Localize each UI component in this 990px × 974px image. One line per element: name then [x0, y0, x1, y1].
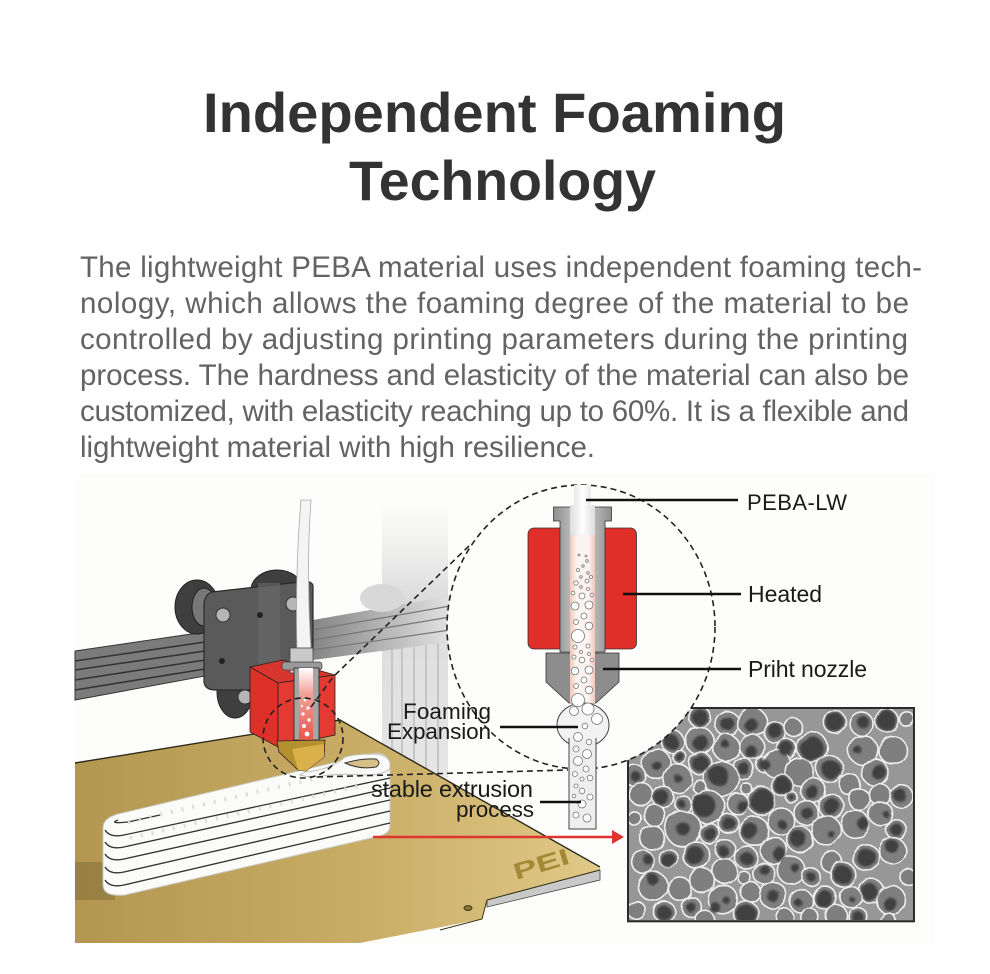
SEM foam micrograph: [624, 706, 916, 930]
callout: PEBA-LW: PEBA-LW: [747, 490, 847, 515]
description text: nology, which allows the foaming degree of the material to be: [80, 287, 909, 320]
description text: The lightweight PEBA material uses independent foaming tech-: [80, 251, 922, 284]
nozzle cross-section: [528, 485, 636, 829]
callout: Print nozzle: Priht nozzle: [748, 656, 867, 682]
filament: [296, 500, 311, 650]
callout: Heated: Heated: [748, 581, 822, 607]
description text: controlled by adjusting printing parameters during the printing: [80, 323, 908, 356]
description text: lightweight material with high resilience.: [80, 431, 595, 464]
printed foam part: [103, 753, 390, 895]
carriage with wheels: [175, 570, 313, 718]
brass nozzle: [277, 740, 325, 771]
foam bubbles: [570, 554, 602, 822]
illustration backdrop: [75, 474, 935, 943]
magnified nozzle circle: [447, 485, 715, 769]
callout: stable extrusion process: process: [456, 797, 534, 822]
collar: [290, 648, 313, 673]
material channel: [570, 485, 595, 703]
title: [203, 81, 786, 212]
nozzle tip: [546, 653, 619, 703]
expanded bulb: [557, 703, 609, 747]
PEI mark: PEI: [510, 844, 573, 885]
throat: [554, 507, 612, 652]
description text: [80, 251, 922, 464]
heater block and hot end: [250, 500, 335, 771]
callout: stable extrusion process: [371, 776, 581, 822]
title: Technology: [349, 149, 656, 212]
callout: Foaming Expansion: Expansion: [387, 719, 491, 744]
title: Independent Foaming: [203, 81, 786, 144]
red arrow: [373, 830, 624, 844]
callout: stable extrusion process: stable extrusion: [371, 776, 533, 802]
description text: customized, with elasticity reaching up to 60%. It is a flexible and: [80, 395, 909, 428]
description text: process. The hardness and elasticity of the material can also be: [80, 359, 909, 392]
printer frame column: [382, 500, 448, 780]
zoom connector lines: [263, 545, 568, 778]
heater block section: [528, 528, 636, 649]
callout: Foaming Expansion: Foaming: [403, 699, 491, 724]
callout: Foaming Expansion: [387, 699, 578, 744]
illustration panel: [75, 474, 935, 943]
print bed: [75, 720, 600, 943]
gantry rail: [75, 584, 450, 700]
extruded strand: [569, 738, 596, 829]
